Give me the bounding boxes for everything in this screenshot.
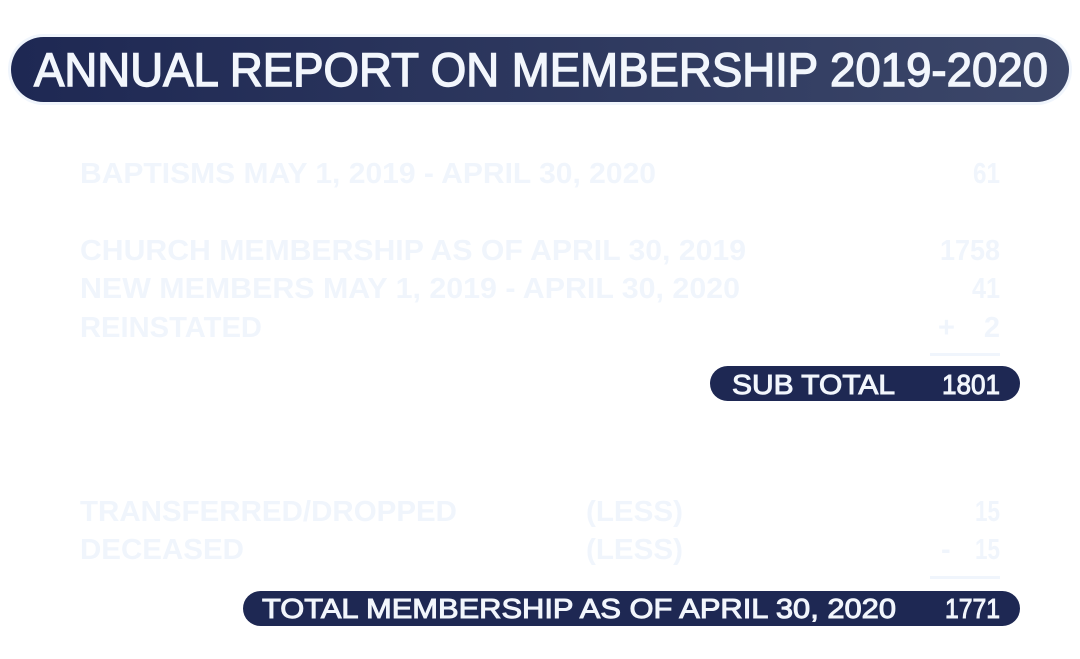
total membership pill — [243, 591, 1020, 626]
row: deceased: DECEASED — [80, 534, 244, 566]
row: transferred/dropped — [80, 496, 1000, 528]
row: reinstated: + — [938, 312, 955, 344]
row: new members: NEW MEMBERS MAY 1, 2019 - APRIL 30, 2020 — [80, 273, 740, 305]
row: deceased: - — [941, 534, 951, 566]
total membership pill: TOTAL MEMBERSHIP AS OF APRIL 30, 2020 — [262, 593, 896, 624]
title banner — [8, 34, 1072, 105]
row: deceased: 15 — [975, 534, 1000, 566]
row: transferred/dropped: TRANSFERRED/DROPPED — [80, 496, 457, 528]
sub total pill: 1801 — [942, 369, 1000, 400]
row: baptisms: BAPTISMS MAY 1, 2019 - APRIL 30, 2020 — [80, 158, 656, 190]
sub total pill: SUB TOTAL — [732, 369, 895, 400]
title: ANNUAL REPORT ON MEMBERSHIP 2019-2020 — [34, 43, 1048, 96]
row: church membership: 1758 — [940, 235, 1000, 267]
row: new members — [80, 273, 1000, 305]
row: transferred/dropped: (LESS) — [586, 496, 683, 528]
row: new members: 41 — [972, 273, 1000, 305]
row: deceased — [80, 534, 1000, 566]
row: deceased: (LESS) — [586, 534, 683, 566]
sub total pill — [710, 366, 1020, 401]
row: church membership — [80, 235, 1000, 267]
row: baptisms: 61 — [973, 158, 1000, 190]
row: baptisms — [80, 158, 1000, 190]
row: reinstated: REINSTATED — [80, 312, 262, 344]
row: reinstated: 2 — [984, 312, 1000, 344]
total membership pill: 1771 — [945, 593, 1000, 624]
row: transferred/dropped: 15 — [975, 496, 1000, 528]
row: reinstated — [80, 312, 1000, 344]
row: church membership: CHURCH MEMBERSHIP AS OF APRIL 30, 2019 — [80, 235, 746, 267]
